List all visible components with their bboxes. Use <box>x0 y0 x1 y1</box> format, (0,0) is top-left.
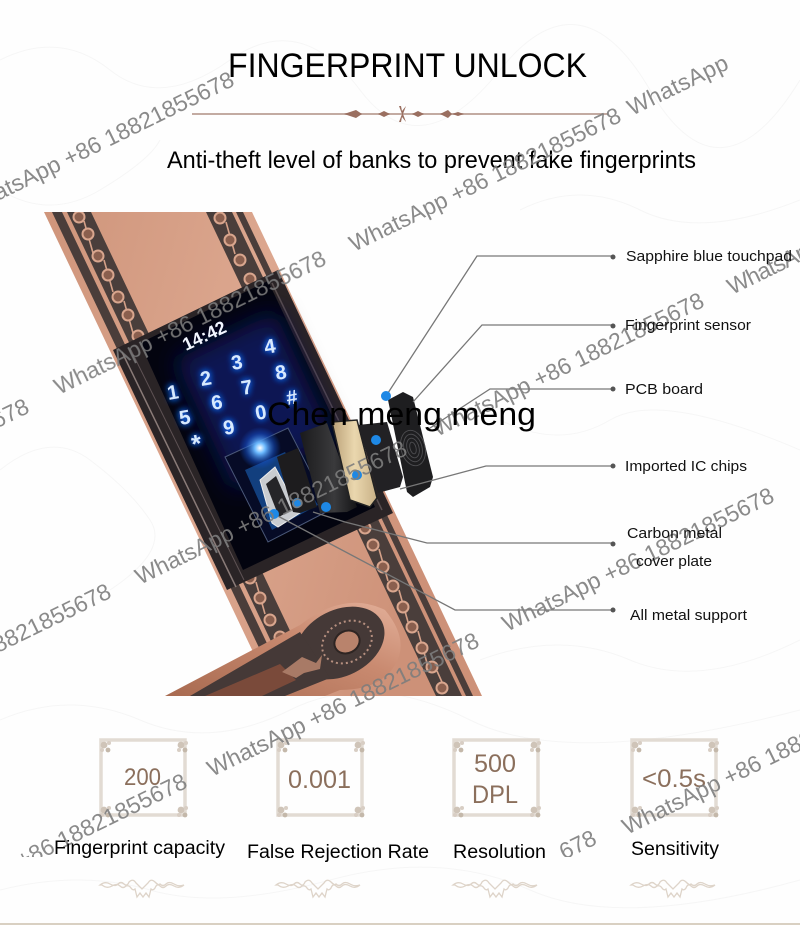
silver fingerprint reader <box>260 467 300 527</box>
blue part markers <box>269 391 391 519</box>
spec frame: fingerprint capacity <box>100 740 188 817</box>
plate ornament chain <box>84 221 446 691</box>
spec frame: resolution <box>453 740 541 817</box>
carbon cover plate <box>300 423 357 513</box>
callout labels <box>625 248 792 624</box>
sapphire fingerprint pad <box>388 392 433 497</box>
title divider ornament <box>192 106 608 122</box>
spec labels: Fingerprint capacity <box>54 838 226 859</box>
spec labels: Resolution <box>453 842 546 863</box>
watermarks: 678 <box>555 824 600 864</box>
title: FINGERPRINT UNLOCK <box>228 47 587 85</box>
keypad digits: 7 <box>240 376 254 400</box>
callout labels: Sapphire blue touchpad <box>626 248 792 265</box>
spec labels: Sensitivity <box>631 839 720 860</box>
callout labels: Fingerprint sensor <box>625 317 751 334</box>
keypad digits: # <box>285 386 299 410</box>
bottom ornaments <box>100 880 715 897</box>
keypad digits: 1 <box>166 381 180 405</box>
keypad digits: 8 <box>274 361 288 385</box>
keypad digits: 2 <box>199 367 213 391</box>
watermarks: WhatsApp +86 18821855678 <box>428 287 708 441</box>
leader lines <box>274 254 616 612</box>
spec labels <box>54 838 720 863</box>
black IC block <box>358 422 403 493</box>
keypad digits: 6 <box>210 391 224 415</box>
keypad digits: 3 <box>230 351 244 375</box>
spec frame: false rejection rate: 0.001 <box>288 766 351 794</box>
callout labels: PCB board <box>625 381 703 398</box>
watermarks: WhatsApp +86 18821855678 <box>50 245 330 399</box>
callout labels: All metal support <box>630 607 748 624</box>
spec frame: resolution: 500 <box>474 750 516 778</box>
touch screen <box>140 281 375 570</box>
gold PCB board <box>332 420 377 507</box>
spec frame: sensitivity: <0.5s <box>642 765 706 793</box>
spec frame: fingerprint capacity: 200 <box>124 764 161 791</box>
watermarks: WhatsApp <box>623 49 732 120</box>
spec frame: sensitivity <box>631 740 719 817</box>
keypad digits: * <box>189 429 204 459</box>
lock module body <box>113 270 393 590</box>
keypad digits: 4 <box>263 335 278 359</box>
keypad digits: 9 <box>222 416 236 440</box>
subtitle: Anti-theft level of banks to prevent fake fingerprints <box>167 147 696 174</box>
callout labels: Carbon metal <box>627 525 722 542</box>
keypad digits <box>166 335 299 459</box>
textured black cover <box>277 448 317 513</box>
watermarks: WhatsApp +86 18821855678 <box>131 435 411 589</box>
watermarks: WhatsApp +86 18821855678 <box>203 627 483 781</box>
door lock photo <box>44 212 482 696</box>
keypad digits: 5 <box>178 406 192 430</box>
callout labels: cover plate <box>636 553 712 570</box>
clock display: 14:42 <box>179 317 229 355</box>
keypad digits: 0 <box>254 401 268 425</box>
sensor window <box>225 427 330 542</box>
spec frame: resolution: DPL <box>472 781 518 809</box>
watermarks: WhatsApp +86 18821855678 <box>345 102 625 256</box>
lock plate <box>44 212 482 696</box>
watermarks: WhatsApp +86 18821855678 <box>498 482 778 636</box>
door handle <box>165 592 401 696</box>
spec labels: False Rejection Rate <box>247 842 429 863</box>
spec frame: false rejection rate <box>277 740 365 817</box>
callout labels: Imported IC chips <box>625 458 747 475</box>
overlay name: Chen meng meng <box>267 396 536 432</box>
